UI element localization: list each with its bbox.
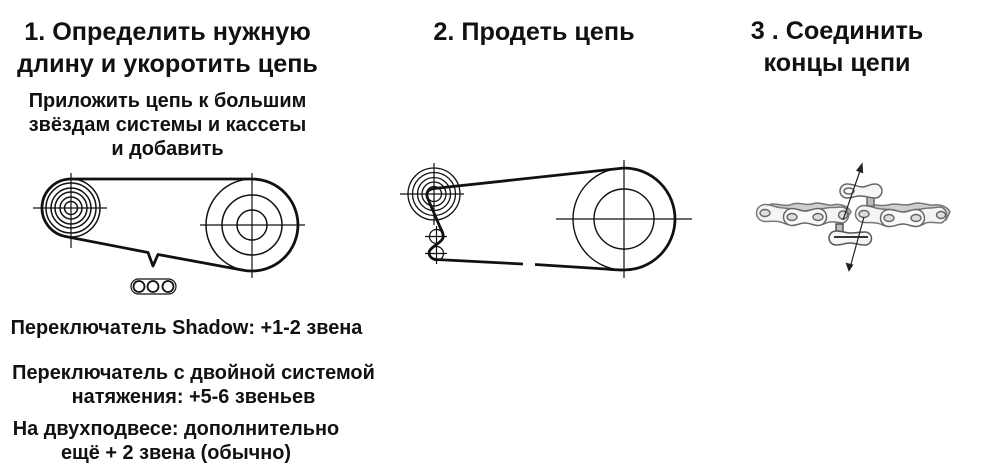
heading: step 3: 3 . Соединить [751, 17, 923, 45]
diagram: chain on largest sprockets [33, 173, 305, 294]
icon: cassette sprockets [33, 173, 107, 248]
icon: three added chain links [131, 279, 176, 294]
icon: derailleur pulleys [425, 226, 447, 264]
master link lower plate [829, 224, 872, 245]
text: full suspension: На двухподвесе: дополнительно [13, 418, 339, 440]
text: double tension derailleur: натяжения: +5-6 звеньев [72, 386, 315, 408]
chain path with gap [427, 168, 675, 270]
text: chain measuring instruction [29, 90, 306, 160]
text: double tension derailleur: Переключатель с двойной системой [12, 362, 375, 384]
heading: step 3 [751, 17, 923, 77]
heading: step 1: 1. Определить нужную [24, 18, 311, 46]
text: full suspension: ещё + 2 звена (обычно) [61, 442, 291, 464]
heading: step 2: 2. Продеть цепь [433, 18, 635, 46]
heading: step 1: длину и укоротить цепь [17, 50, 318, 78]
text: chain measuring instruction: и добавить [111, 138, 224, 160]
text: double tension derailleur [12, 362, 375, 408]
chain path with notch [42, 179, 298, 271]
chain right section [856, 203, 950, 226]
arrow: upper pin direction [843, 164, 862, 220]
icon: cassette sprockets [400, 163, 464, 225]
chain left section [756, 203, 851, 226]
text: Shadow derailleur: Переключатель Shadow: +1-2 звена [11, 317, 362, 339]
text: chain measuring instruction: звёздам системы и кассеты [29, 114, 306, 136]
diagram: joining chain with master link [756, 164, 950, 270]
master link upper plate [840, 184, 882, 206]
heading: step 1 [17, 18, 318, 78]
text: chain measuring instruction: Приложить цепь к большим [29, 90, 306, 112]
icon: chainring sprockets [200, 173, 305, 278]
icon: chainring sprockets [556, 160, 692, 278]
heading: step 3: концы цепи [763, 49, 911, 77]
arrow: lower pin direction [846, 217, 864, 270]
text: full suspension [13, 418, 339, 464]
diagram: threading the chain [400, 160, 692, 278]
